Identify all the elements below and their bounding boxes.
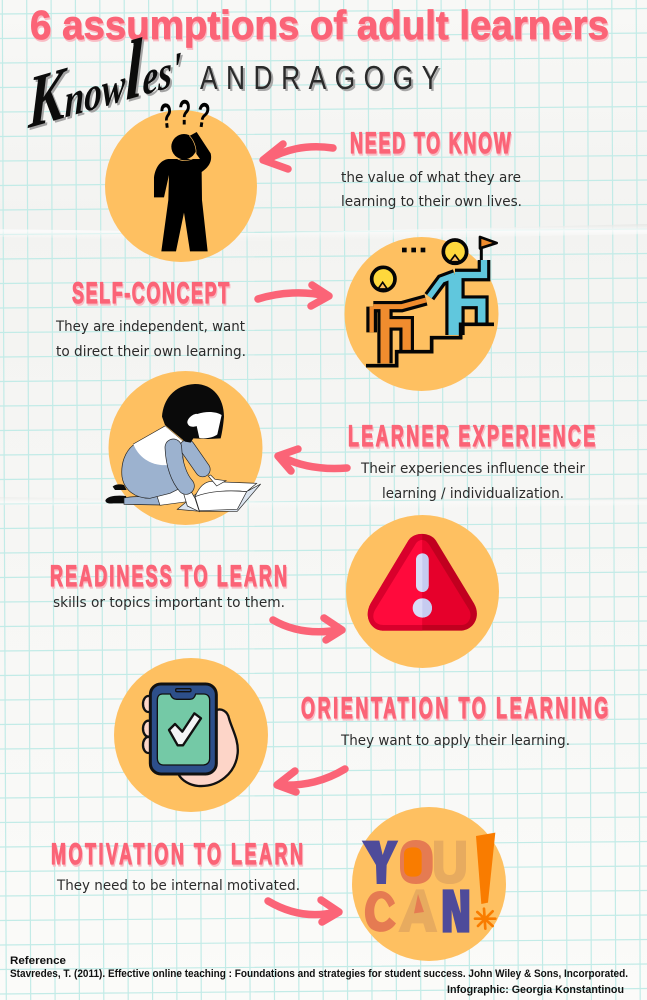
heading: self-concept: SELF-CONCEPT [73, 280, 230, 312]
text: learner experience: Their experiences influence their [360, 461, 585, 477]
footer: reference: Reference [10, 955, 66, 967]
footer: reference [10, 955, 628, 980]
heading: learner experience: LEARNER EXPERIENCE [349, 423, 596, 455]
heading: need to know: NEED TO KNOW [350, 128, 511, 160]
icon: helping up stairs [366, 237, 497, 366]
arrow: readiness to learn [273, 618, 342, 640]
text: learner experience: learning / individualization. [382, 486, 564, 502]
heading: motivation to learn: MOTIVATION TO LEARN [52, 841, 304, 873]
text: orientation to learning: They want to apply their learning. [340, 733, 570, 749]
text: motivation to learn: They need to be internal motivated. [56, 878, 300, 894]
heading: orientation to learning: ORIENTATION TO LEARNING [302, 695, 609, 727]
heading: readiness to learn: READINESS TO LEARN [50, 561, 287, 593]
heading: Knowles' script: Knowles' [29, 12, 184, 149]
heading: Knowles' script: Knowles' [27, 10, 182, 147]
arrow: need to know [263, 144, 333, 169]
heading: need to know: NEED TO KNOW [351, 130, 512, 162]
panel: learner experience icon [105, 371, 263, 525]
arrow: self-concept [258, 285, 329, 306]
heading: motivation to learn: MOTIVATION TO LEARN [51, 839, 303, 871]
heading: self-concept: SELF-CONCEPT [72, 278, 229, 310]
icon: phone with check [143, 684, 238, 786]
heading: learner experience: LEARNER EXPERIENCE [348, 421, 595, 453]
icon: confused person: ? [178, 94, 191, 133]
heading: Andragogy: ANDRAGOGY [202, 62, 441, 99]
heading: readiness to learn: READINESS TO LEARN [51, 563, 288, 595]
panel: self-concept icon [344, 237, 498, 391]
text: readiness to learn: skills or topics important to them. [53, 595, 285, 611]
heading: Andragogy: ANDRAGOGY [200, 60, 439, 97]
panel: orientation icon [114, 658, 268, 812]
arrow: orientation to learning [277, 769, 345, 792]
arrow: learner experience [278, 449, 347, 471]
footer: credit: Infographic: Georgia Konstantinou [447, 984, 624, 996]
text: self-concept: They are independent, want [55, 319, 245, 335]
text: learner experience [360, 461, 585, 502]
panel: readiness icon [346, 515, 499, 668]
text: need to know: learning to their own lives. [341, 194, 522, 210]
icon: confused person: ? [158, 97, 175, 137]
arrow: motivation to learn [268, 900, 339, 922]
heading: orientation to learning: ORIENTATION TO LEARNING [301, 693, 608, 725]
icon: you can lettering [362, 833, 495, 933]
panel: you can icon [352, 807, 506, 961]
icon: girl reading book [105, 384, 261, 512]
icon: confused person: ? [194, 96, 212, 136]
icon: confused person [154, 94, 212, 251]
icon: warning triangle [368, 534, 477, 631]
text: need to know [341, 170, 522, 210]
panel: need to know icon [105, 94, 257, 262]
text: need to know: the value of what they are [341, 170, 521, 186]
title: 6 assumptions of adult learners [30, 2, 609, 48]
text: self-concept: to direct their own learning. [56, 344, 246, 360]
text: self-concept [55, 319, 246, 360]
title: 6 assumptions of adult learners [31, 4, 610, 50]
